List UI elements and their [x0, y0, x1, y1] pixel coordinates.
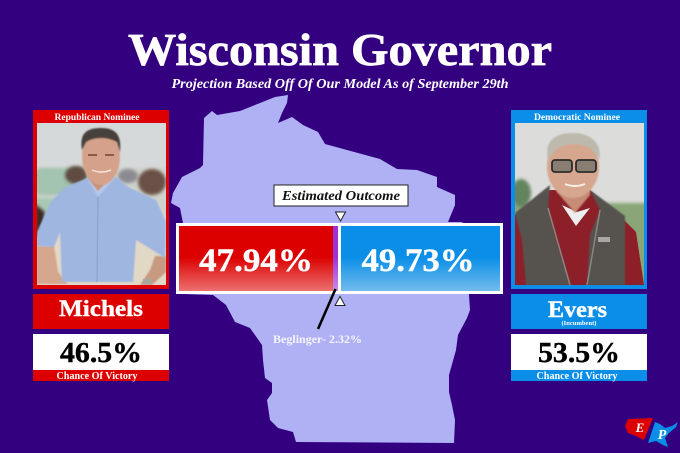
shirt	[515, 190, 644, 285]
label: Beglinger share: Beglinger- 2.32%	[273, 334, 362, 346]
logo: Elections Projection: E	[635, 420, 645, 435]
victory chance: Evers: Chance Of Victory	[536, 371, 618, 382]
forearms	[37, 246, 68, 284]
panel: Democratic candidate card	[510, 110, 650, 293]
candidate name: Evers: Evers	[548, 297, 607, 322]
subtitle: Projection Based Off Of Our Model As of September 29th	[172, 77, 509, 92]
candidate name: Michels	[33, 294, 169, 329]
leader line: Beglinger	[318, 289, 336, 329]
map: Wisconsin state shape	[171, 95, 472, 443]
panel: Republican candidate card	[33, 110, 169, 289]
victory chance: Michels: Chance Of Victory	[56, 371, 138, 382]
candidate name: Michels: Michels	[59, 296, 143, 321]
nominee header: Republican	[33, 110, 169, 289]
callout: estimated outcome label	[274, 185, 408, 206]
photo: Evers	[515, 123, 644, 285]
arrow: down marker	[336, 212, 346, 221]
candidate name: Evers: (Incumbent)	[562, 320, 596, 327]
shirt	[37, 177, 166, 282]
bar chart: projected vote share	[176, 223, 503, 294]
arrow: up marker	[335, 296, 345, 306]
bar: Beglinger share	[333, 226, 338, 291]
neck and head	[556, 190, 591, 214]
logo: Elections Projection	[625, 418, 678, 447]
neck and head	[88, 176, 106, 192]
nominee header: Democratic: Democratic Nominee	[534, 113, 620, 123]
victory chance: Michels: 46.5%	[60, 338, 142, 369]
logo: Elections Projection: P	[658, 428, 667, 443]
vest	[515, 185, 570, 285]
victory chance: Evers	[511, 334, 647, 382]
victory chance: Evers: 53.5%	[538, 338, 620, 369]
nominee header: Republican: Republican Nominee	[54, 113, 140, 123]
bar: Michels share	[179, 226, 333, 291]
title: Wisconsin Governor	[128, 25, 552, 75]
bar: Evers share	[341, 226, 500, 291]
victory chance: Michels	[33, 334, 169, 382]
bar: Michels share: 47.94%	[199, 243, 313, 279]
watch	[143, 279, 152, 284]
callout: estimated outcome label: Estimated Outcome	[281, 188, 400, 203]
candidate name: Evers	[511, 294, 647, 329]
nominee header: Democratic	[511, 110, 647, 289]
photo: Michels	[34, 123, 166, 286]
bar: Evers share: 49.73%	[362, 243, 474, 279]
